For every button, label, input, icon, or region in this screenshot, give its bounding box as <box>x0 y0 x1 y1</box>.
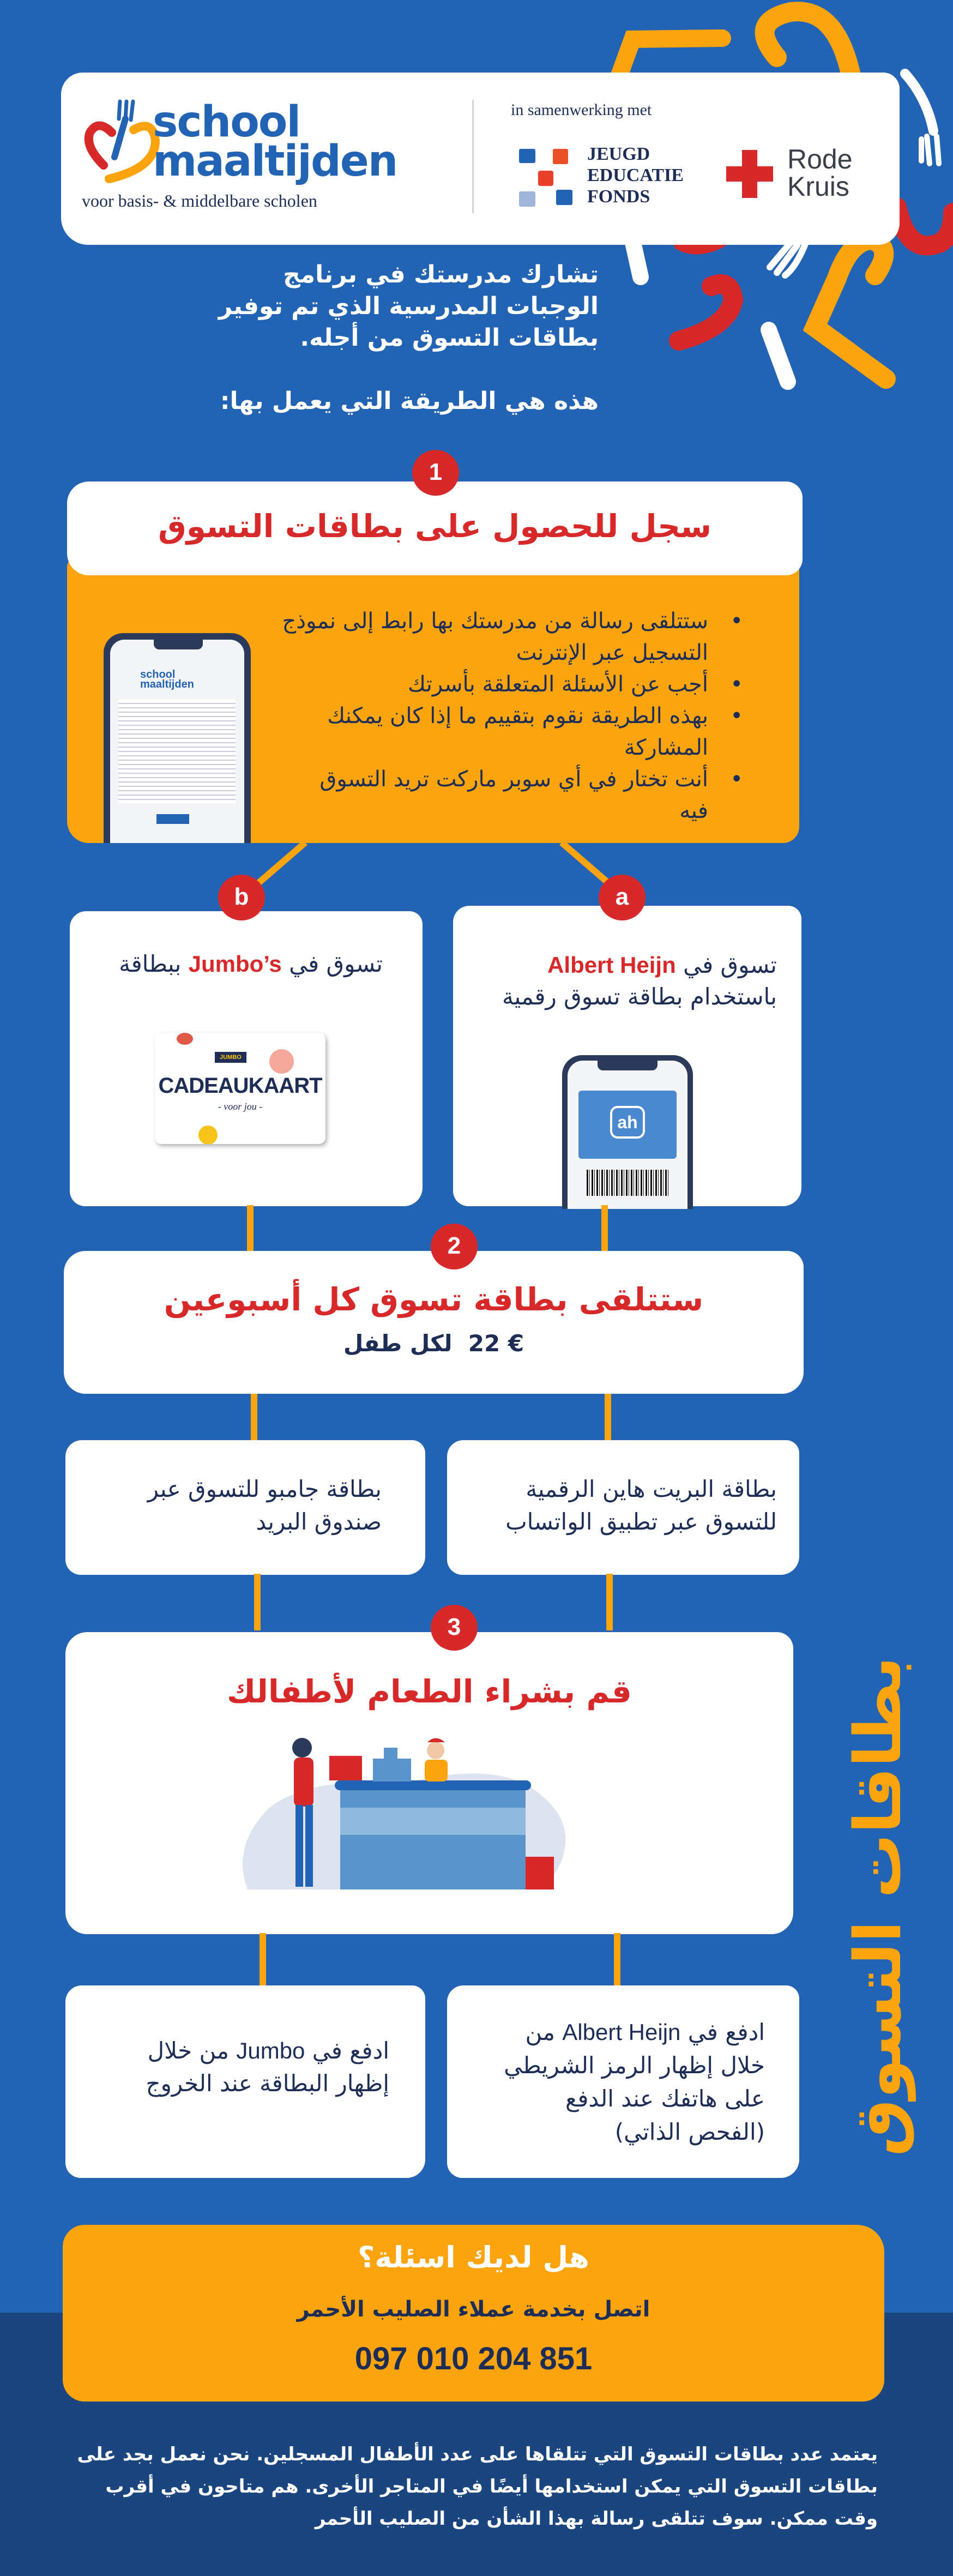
box: jumbo by post <box>65 1440 425 1575</box>
box: pay at AH: (الفحص الذاتي) <box>615 2118 765 2145</box>
badge a: a <box>616 883 629 910</box>
bullet list: أجب عن الأسئلة المتعلقة بأسرتك <box>408 672 708 697</box>
logo: rode kruis <box>726 144 853 202</box>
phone with AH card <box>562 1055 693 1209</box>
phone: registration form <box>104 633 251 843</box>
intro text: تشارك مدرستك في برنامج <box>283 261 599 288</box>
bullet list: فيه <box>679 798 708 823</box>
badge 3: 3 <box>448 1614 461 1640</box>
logo: jeugd educatie fonds: EDUCATIE <box>587 165 684 185</box>
bullet list: ستتلقى رسالة من مدرستك بها رابط إلى نموذج <box>282 609 708 634</box>
jumbo gift card: JUMBO <box>220 1054 242 1061</box>
badge b <box>218 875 265 920</box>
option b: Jumbo: تسوق في Jumbo’s ببطاقة <box>119 950 383 977</box>
partner text: in samenwerking met <box>511 101 652 119</box>
box: pay at jumbo: ادفع في Jumbo من خلال <box>148 2037 389 2064</box>
jumbo gift card <box>155 1033 325 1144</box>
badge 2 <box>431 1224 478 1269</box>
step 1 panel <box>67 450 803 843</box>
jumbo gift card: CADEAUKAART <box>158 1074 322 1098</box>
step 1 header: سجل للحصول على بطاقات التسوق <box>158 508 711 545</box>
vertical title: بطاقات التسوق <box>840 1656 915 2157</box>
logo: rode kruis: Kruis <box>787 171 849 202</box>
box: pay at jumbo: إظهار البطاقة عند الخروج <box>146 2070 389 2097</box>
box: AH via whatsapp: بطاقة البريت هاين الرقمية <box>526 1476 777 1502</box>
questions callout <box>63 2225 884 2402</box>
logo: rode kruis: Rode <box>787 144 853 174</box>
intro text: هذه هي الطريقة التي يعمل بها: <box>220 387 599 415</box>
header panel: logos <box>61 73 900 245</box>
logo: school maaltijden: voor basis- & middelbare scholen <box>82 191 317 210</box>
connector lines <box>251 1394 257 1442</box>
orange body <box>67 556 799 843</box>
step 1 panel: • <box>730 767 743 792</box>
intro text <box>217 261 599 415</box>
box: AH via whatsapp <box>447 1440 799 1575</box>
connector arrows from step 1 <box>256 843 608 885</box>
bottom dark band <box>0 2313 953 2576</box>
bullet list: المشاركة <box>624 735 708 760</box>
questions callout: هل لديك اسئلة؟ <box>358 2240 589 2274</box>
box: jumbo by post: صندوق البريد <box>256 1508 382 1535</box>
footer note: يعتمد عدد بطاقات التسوق التي تتلقاها على عدد الأطفال المسجلين. نحن نعمل بجد على بطاقات التسوق التي يمكن استخدامها أيضًا في المتاجر الأخرى. هم متاحون في أقرب وقت ممكن. سوف تتلقى رسالة بهذا الشأن من الصليب الأحمر <box>77 2443 878 2530</box>
box: AH via whatsapp: للتسوق عبر تطبيق الواتساب <box>505 1508 777 1535</box>
phone: registration form: maaltijden <box>140 678 194 690</box>
logo: jeugd educatie fonds: JEUGD <box>587 144 650 164</box>
badge 1: 1 <box>429 459 442 485</box>
step 3 panel <box>65 1632 793 1934</box>
step 1 header <box>67 482 803 575</box>
phone with AH card: ah <box>617 1112 638 1132</box>
bullet list: أنت تختار في أي سوبر ماركت تريد التسوق <box>319 767 708 792</box>
box: jumbo by post: بطاقة جامبو للتسوق عبر <box>148 1476 382 1502</box>
logo text: maaltijden <box>153 137 397 186</box>
step 2 panel <box>64 1251 804 1394</box>
bullet list <box>282 609 743 823</box>
logo text <box>153 98 397 186</box>
box: pay at AH: على هاتفك عند الدفع <box>565 2085 765 2112</box>
step 3 panel: قم بشراء الطعام لأطفالك <box>227 1673 632 1710</box>
badge b: b <box>234 883 249 910</box>
logo text: school <box>153 98 300 147</box>
bullet list: التسجيل عبر الإنترنت <box>516 640 708 665</box>
badge 3 <box>431 1605 478 1651</box>
logo: school maaltijden <box>82 98 397 210</box>
box: pay at AH: ادفع في Albert Heijn من <box>525 2019 765 2045</box>
connector lines <box>247 1205 254 1254</box>
box: pay at jumbo <box>65 1985 425 2178</box>
logo: jeugd educatie fonds <box>519 144 684 207</box>
logo: jeugd educatie fonds: FONDS <box>587 186 650 207</box>
step 2 panel: € 22 لكل طفل <box>343 1330 524 1357</box>
step 1 panel: • <box>730 609 743 634</box>
illustration: checkout counter <box>243 1738 566 1889</box>
phone: registration form: school <box>140 669 175 681</box>
connector lines <box>260 1933 266 1988</box>
jumbo gift card: - voor jou - <box>218 1101 262 1112</box>
questions callout: 097 010 204 851 <box>355 2341 592 2376</box>
option a: Albert Heijn: باستخدام بطاقة تسوق رقمية <box>502 983 777 1010</box>
badge 2: 2 <box>448 1232 461 1259</box>
box: pay at AH <box>447 1985 799 2178</box>
questions callout: اتصل بخدمة عملاء الصليب الأحمر <box>297 2297 650 2322</box>
step 2 panel: ستتلقى بطاقة تسوق كل أسبوعين <box>164 1281 703 1318</box>
box: pay at AH: خلال إظهار الرمز الشريطي <box>504 2052 765 2079</box>
step 1 panel: • <box>730 703 743 729</box>
intro text: بطاقات التسوق من أجله. <box>300 324 599 352</box>
decorations: top right shapes <box>611 2 953 390</box>
option a: Albert Heijn: تسوق في Albert Heijn <box>547 952 777 978</box>
option a: Albert Heijn <box>453 906 801 1206</box>
icon: heart with fork <box>84 99 160 183</box>
option b: Jumbo <box>70 911 423 1206</box>
step 1 panel: • <box>730 672 743 697</box>
connector lines <box>254 1574 261 1630</box>
badge a <box>599 875 646 920</box>
bullet list: بهذه الطريقة نقوم بتقييم ما إذا كان يمكنك <box>327 703 708 729</box>
badge 1 <box>412 450 459 496</box>
intro text: الوجبات المدرسية الذي تم توفير <box>219 292 599 320</box>
